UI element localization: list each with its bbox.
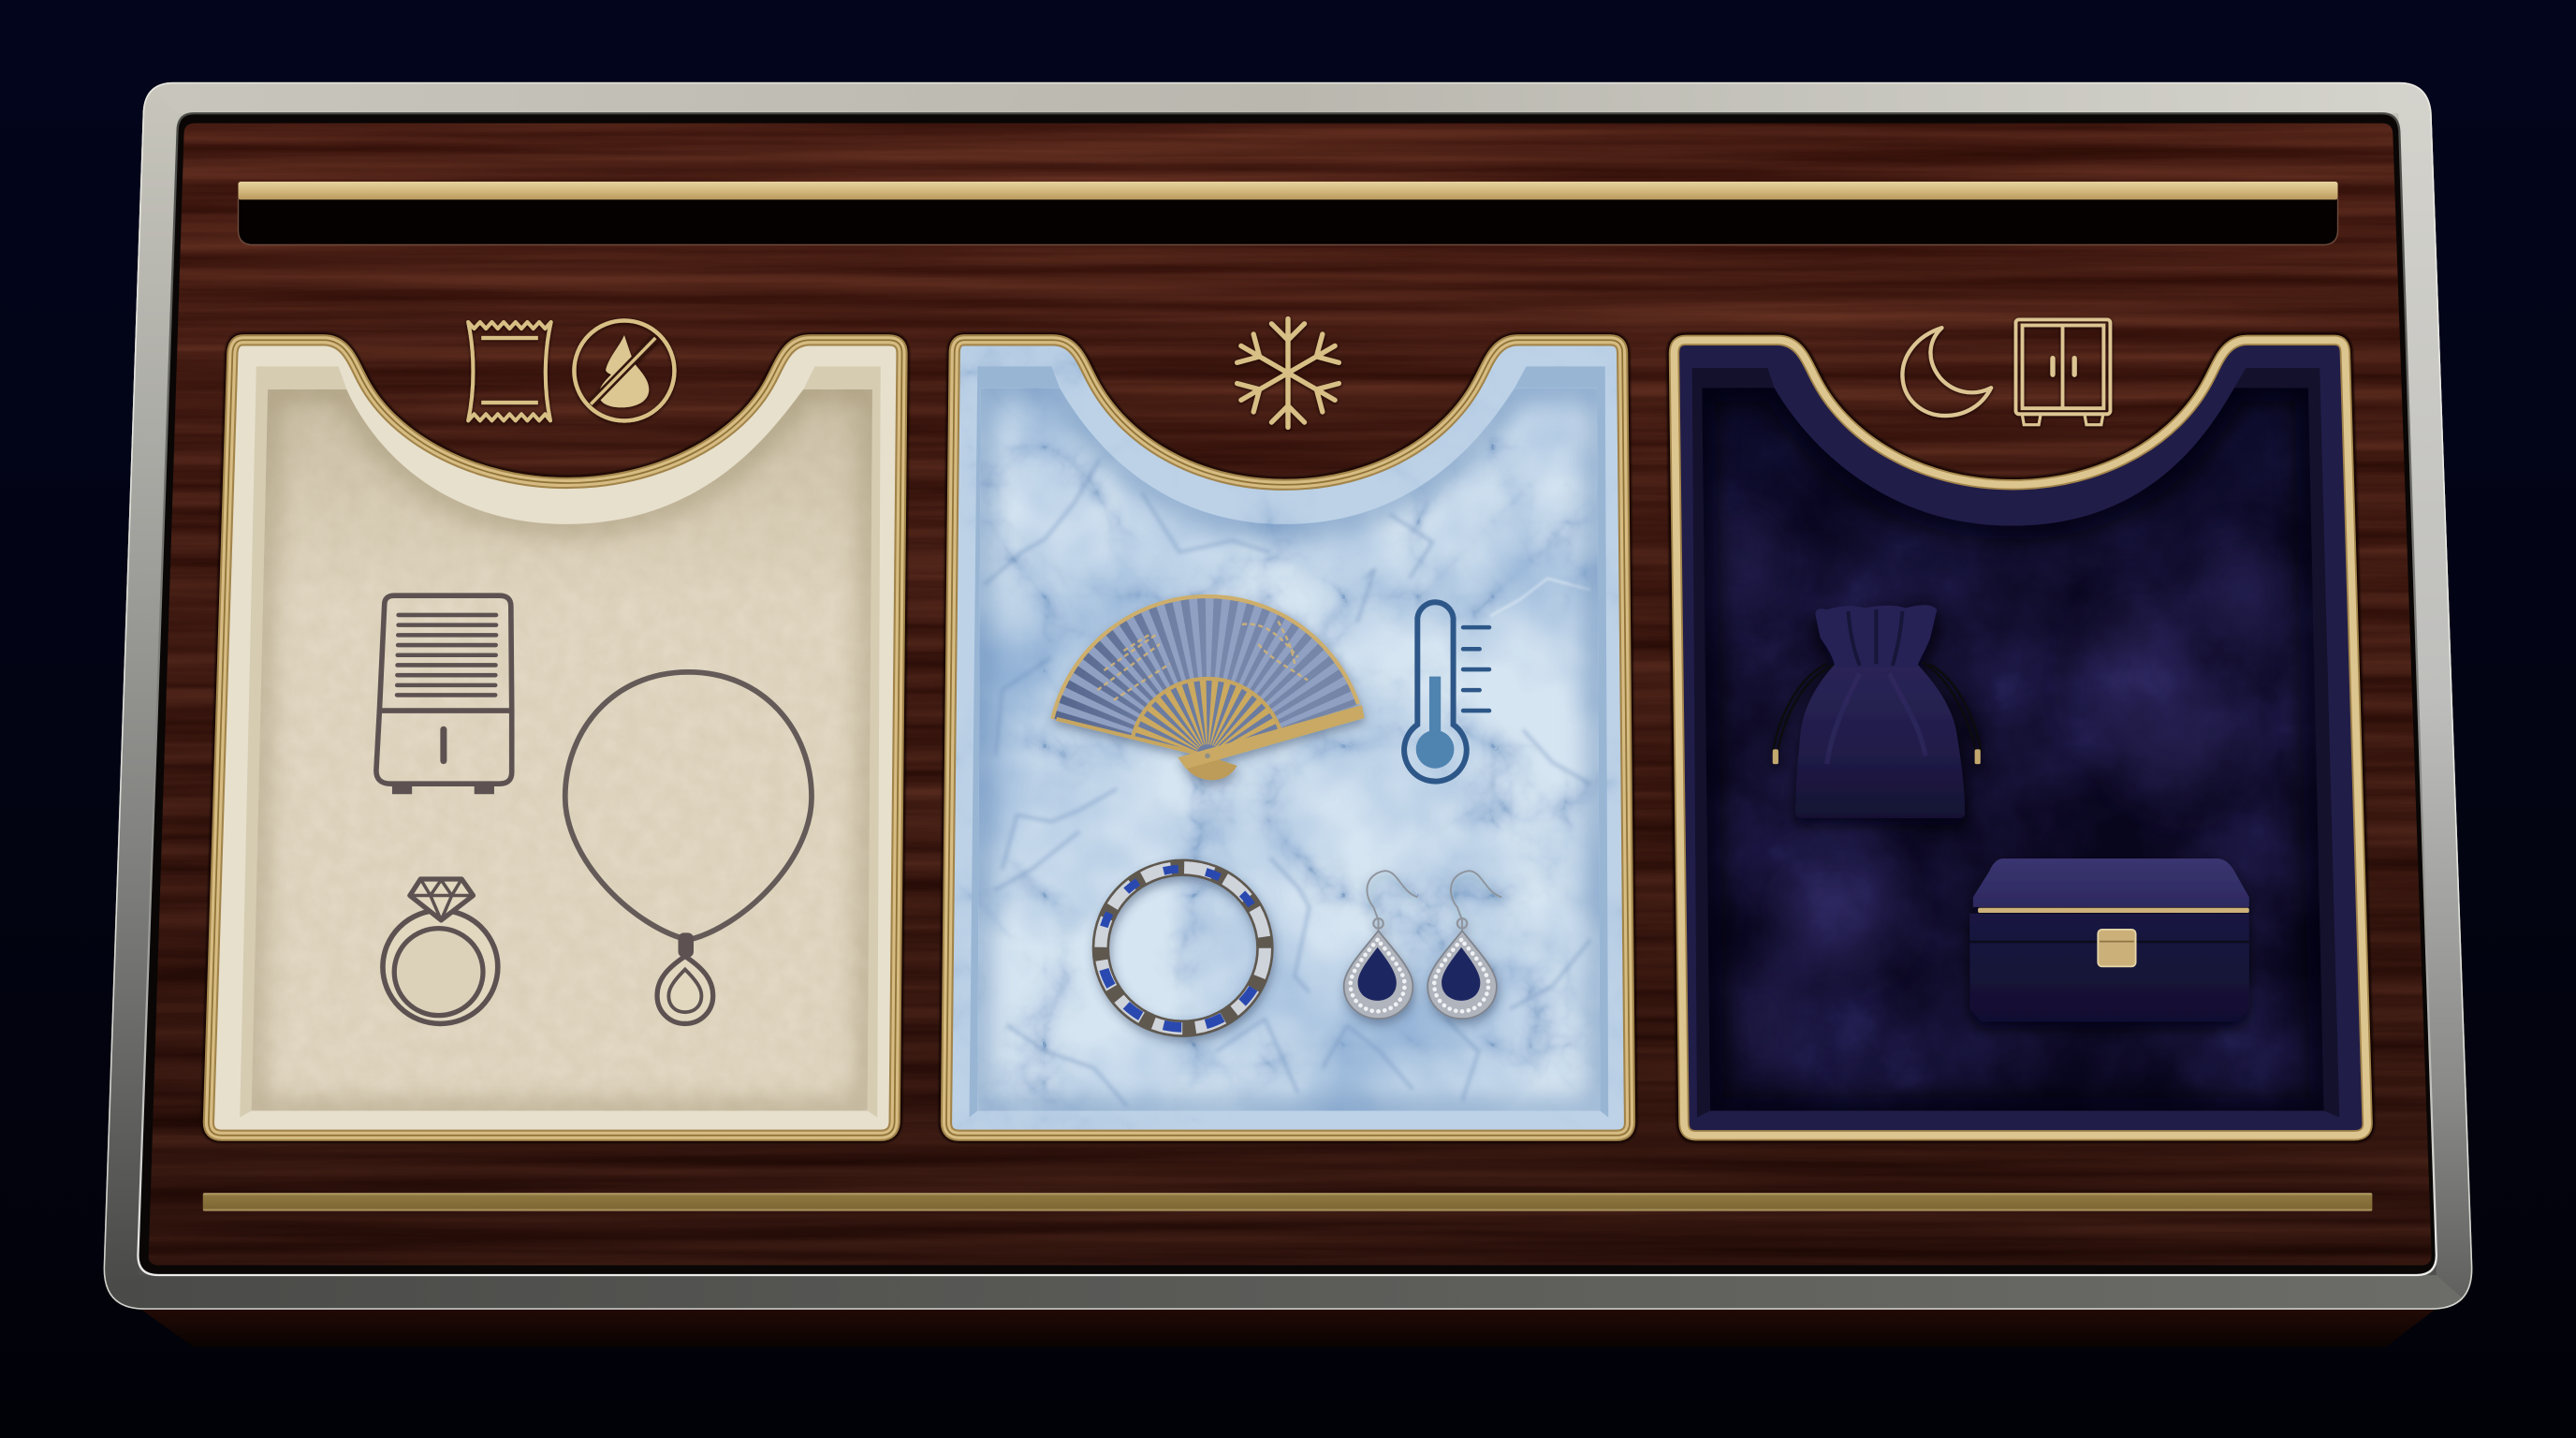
earring left xyxy=(1344,871,1418,1019)
wood panel xyxy=(149,124,2432,1265)
icon: snowflake xyxy=(1233,318,1343,427)
fan xyxy=(1048,594,1370,791)
velvet jewellery box xyxy=(1969,858,2249,1022)
top slot with gold bar xyxy=(238,182,2338,245)
tray 3: navy velvet xyxy=(1674,340,2367,1136)
icon: wardrobe xyxy=(2016,319,2110,425)
tray 1: cream suede xyxy=(209,340,902,1136)
bottom gold bar xyxy=(203,1193,2372,1211)
marble veins xyxy=(984,460,1590,1106)
frame inner recess xyxy=(138,113,2437,1275)
velvet light patches xyxy=(1701,509,2284,1084)
icon: crescent moon xyxy=(1902,328,1991,416)
icon: no water xyxy=(574,320,674,420)
metal frame xyxy=(98,79,2481,1314)
icon: diamond ring xyxy=(383,879,498,1023)
icon: desiccant sachet xyxy=(468,322,551,420)
earring right xyxy=(1427,871,1501,1019)
box side below frame xyxy=(141,1310,2435,1347)
icon: necklace with pendant xyxy=(565,672,812,1023)
velvet drawstring pouch xyxy=(1773,605,1982,818)
icon: dehumidifier xyxy=(376,595,512,792)
tray 2: blue marble xyxy=(946,340,1630,1136)
fan gold decoration xyxy=(1097,621,1308,700)
icon: thermometer xyxy=(1404,602,1489,782)
sapphire bracelet xyxy=(1101,868,1265,1029)
